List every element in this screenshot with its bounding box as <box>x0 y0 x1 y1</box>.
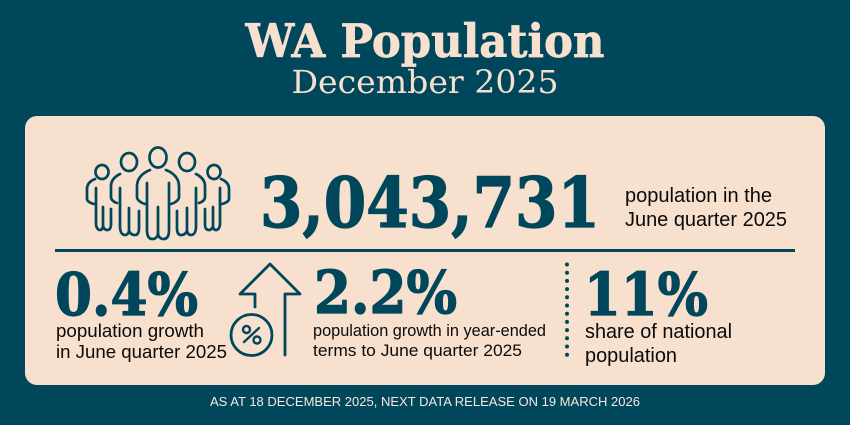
stat: quarterly growth: 0.4% <box>55 260 198 329</box>
panel: statistics <box>25 116 825 385</box>
footer note: AS AT 18 DECEMBER 2025, NEXT DATA RELEASE ON 19 MARCH 2026 <box>210 395 640 409</box>
dotted separator <box>565 264 569 356</box>
stat: annual growth: 2.2% <box>314 258 457 327</box>
headline label: June quarter 2025 <box>625 209 787 231</box>
stat: quarterly growth: in June quarter 2025 <box>56 341 227 362</box>
headline figure: 3,043,731 <box>260 163 600 244</box>
stat: quarterly growth: population growth <box>56 320 204 341</box>
stat: national share: 11% <box>584 260 708 329</box>
stat: quarterly growth <box>55 260 227 362</box>
stat: national share: share of national <box>585 321 732 343</box>
stat: annual growth: terms to June quarter 2025 <box>313 341 522 360</box>
subtitle: December 2025 <box>292 63 558 101</box>
icon: up arrow with percent <box>231 264 300 356</box>
stat: national share: population <box>585 345 677 367</box>
title: WA Population <box>245 14 604 68</box>
divider <box>55 249 795 252</box>
stat: national share <box>584 260 732 367</box>
headline label: population in the <box>625 185 772 207</box>
stat: annual growth <box>313 258 546 360</box>
stat: annual growth: population growth in year-ended <box>313 321 546 340</box>
icon: group of people <box>87 148 229 239</box>
